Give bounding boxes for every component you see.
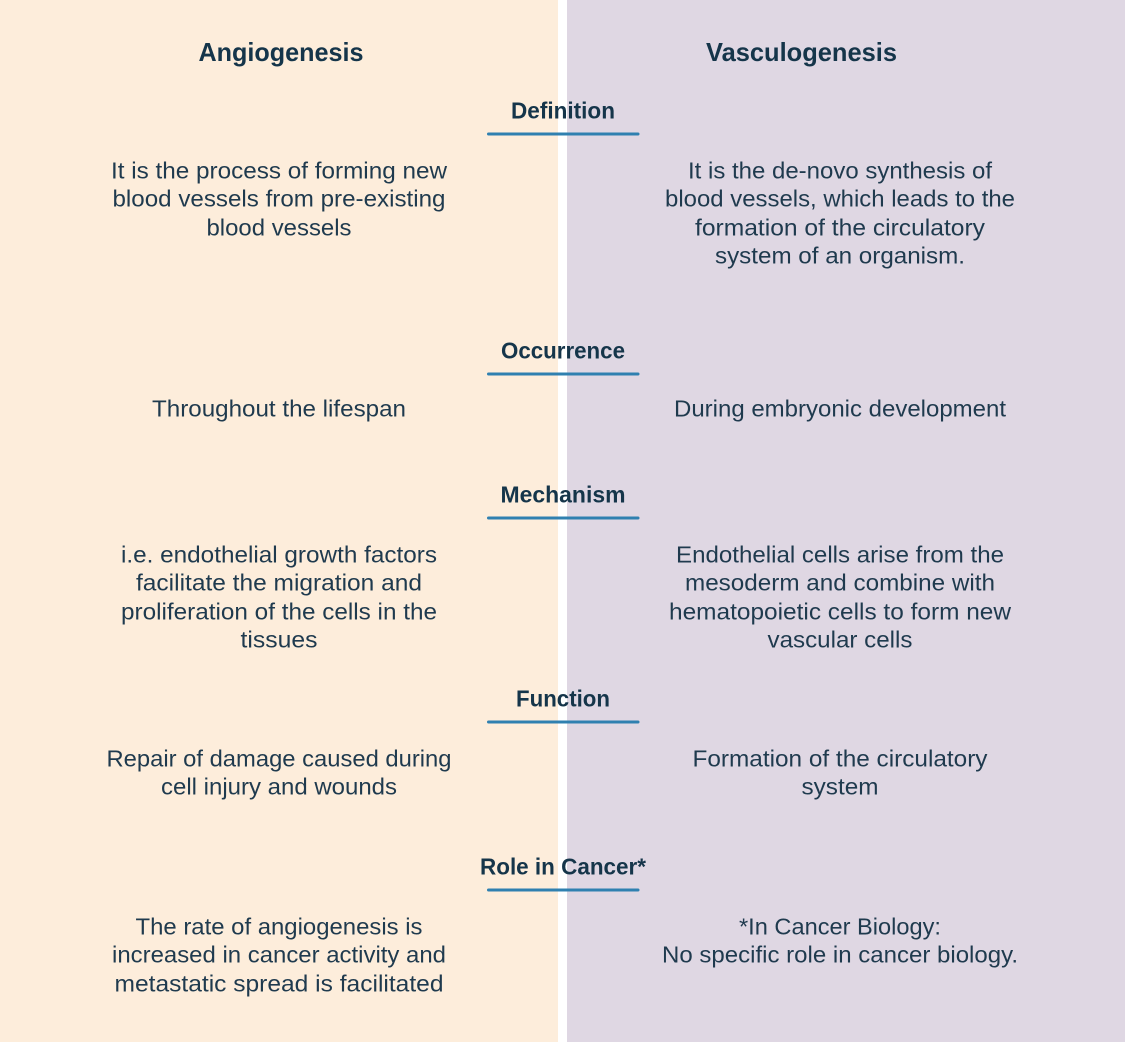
text: Angiogenesis role in cancer: metastatic spread is facilitated xyxy=(114,970,444,996)
text: Angiogenesis role in cancer: increased in cancer activity and xyxy=(112,942,446,968)
text: Vasculogenesis role in cancer: *In Cancer Biology: xyxy=(739,914,941,940)
text: Vasculogenesis definition xyxy=(665,158,1015,268)
text: Angiogenesis occurrence: Throughout the lifespan xyxy=(152,396,406,422)
text: Vasculogenesis role in cancer: No specific role in cancer biology. xyxy=(662,942,1018,968)
section: Definition heading xyxy=(487,98,640,136)
text: Angiogenesis definition xyxy=(111,158,448,240)
text: Vasculogenesis definition: It is the de-novo synthesis of xyxy=(688,158,992,184)
section: Function heading: Function xyxy=(516,686,610,712)
section: Function heading xyxy=(487,686,640,724)
section: Role in Cancer heading xyxy=(480,854,646,892)
text: Angiogenesis role in cancer: The rate of angiogenesis is xyxy=(136,914,423,940)
section: Mechanism heading: Mechanism xyxy=(500,482,626,508)
text: Angiogenesis mechanism: facilitate the migration and xyxy=(136,570,422,596)
text: Vasculogenesis function: system xyxy=(802,774,878,800)
text: Angiogenesis mechanism: i.e. endothelial growth factors xyxy=(121,542,437,568)
text: Vasculogenesis definition: blood vessels, which leads to the xyxy=(665,186,1015,212)
text: Vasculogenesis function xyxy=(692,746,988,800)
text: Vasculogenesis mechanism: Endothelial cells arise from the xyxy=(676,542,1004,568)
text: Angiogenesis definition: blood vessels from pre-existing xyxy=(112,186,446,212)
section: Occurrence heading: Occurrence xyxy=(501,338,625,364)
section: Mechanism heading xyxy=(487,482,640,520)
text: Vasculogenesis mechanism: mesoderm and combine with xyxy=(685,570,995,596)
text: Angiogenesis mechanism: proliferation of the cells in the xyxy=(121,598,437,624)
heading: Angiogenesis: Angiogenesis xyxy=(198,37,364,67)
panel: angiogenesis background xyxy=(0,0,558,1042)
text: Vasculogenesis role in cancer xyxy=(662,914,1018,968)
text: Vasculogenesis definition: formation of the circulatory xyxy=(695,214,985,240)
text: Angiogenesis function: cell injury and wounds xyxy=(161,774,397,800)
text: Angiogenesis mechanism: tissues xyxy=(240,626,318,652)
section: Occurrence heading xyxy=(487,338,640,376)
section: Definition heading: Definition xyxy=(511,98,615,124)
text: Vasculogenesis occurrence: During embryonic development xyxy=(674,396,1006,422)
text: Angiogenesis mechanism xyxy=(121,542,437,652)
text: Vasculogenesis mechanism: hematopoietic cells to form new xyxy=(669,598,1012,624)
text: Vasculogenesis function: Formation of the circulatory xyxy=(692,746,988,772)
section: Role in Cancer heading: Role in Cancer* xyxy=(480,854,646,880)
panel: vasculogenesis background xyxy=(567,0,1125,1042)
text: Vasculogenesis definition: system of an organism. xyxy=(715,242,965,268)
text: Vasculogenesis mechanism xyxy=(669,542,1012,652)
text: Angiogenesis role in cancer xyxy=(112,914,446,996)
text: Vasculogenesis mechanism: vascular cells xyxy=(768,626,912,652)
text: Angiogenesis definition: blood vessels xyxy=(206,214,352,240)
heading: Vasculogenesis: Vasculogenesis xyxy=(706,37,897,67)
text: Angiogenesis function xyxy=(106,746,452,800)
text: Angiogenesis function: Repair of damage caused during xyxy=(106,746,452,772)
text: Angiogenesis definition: It is the process of forming new xyxy=(111,158,448,184)
